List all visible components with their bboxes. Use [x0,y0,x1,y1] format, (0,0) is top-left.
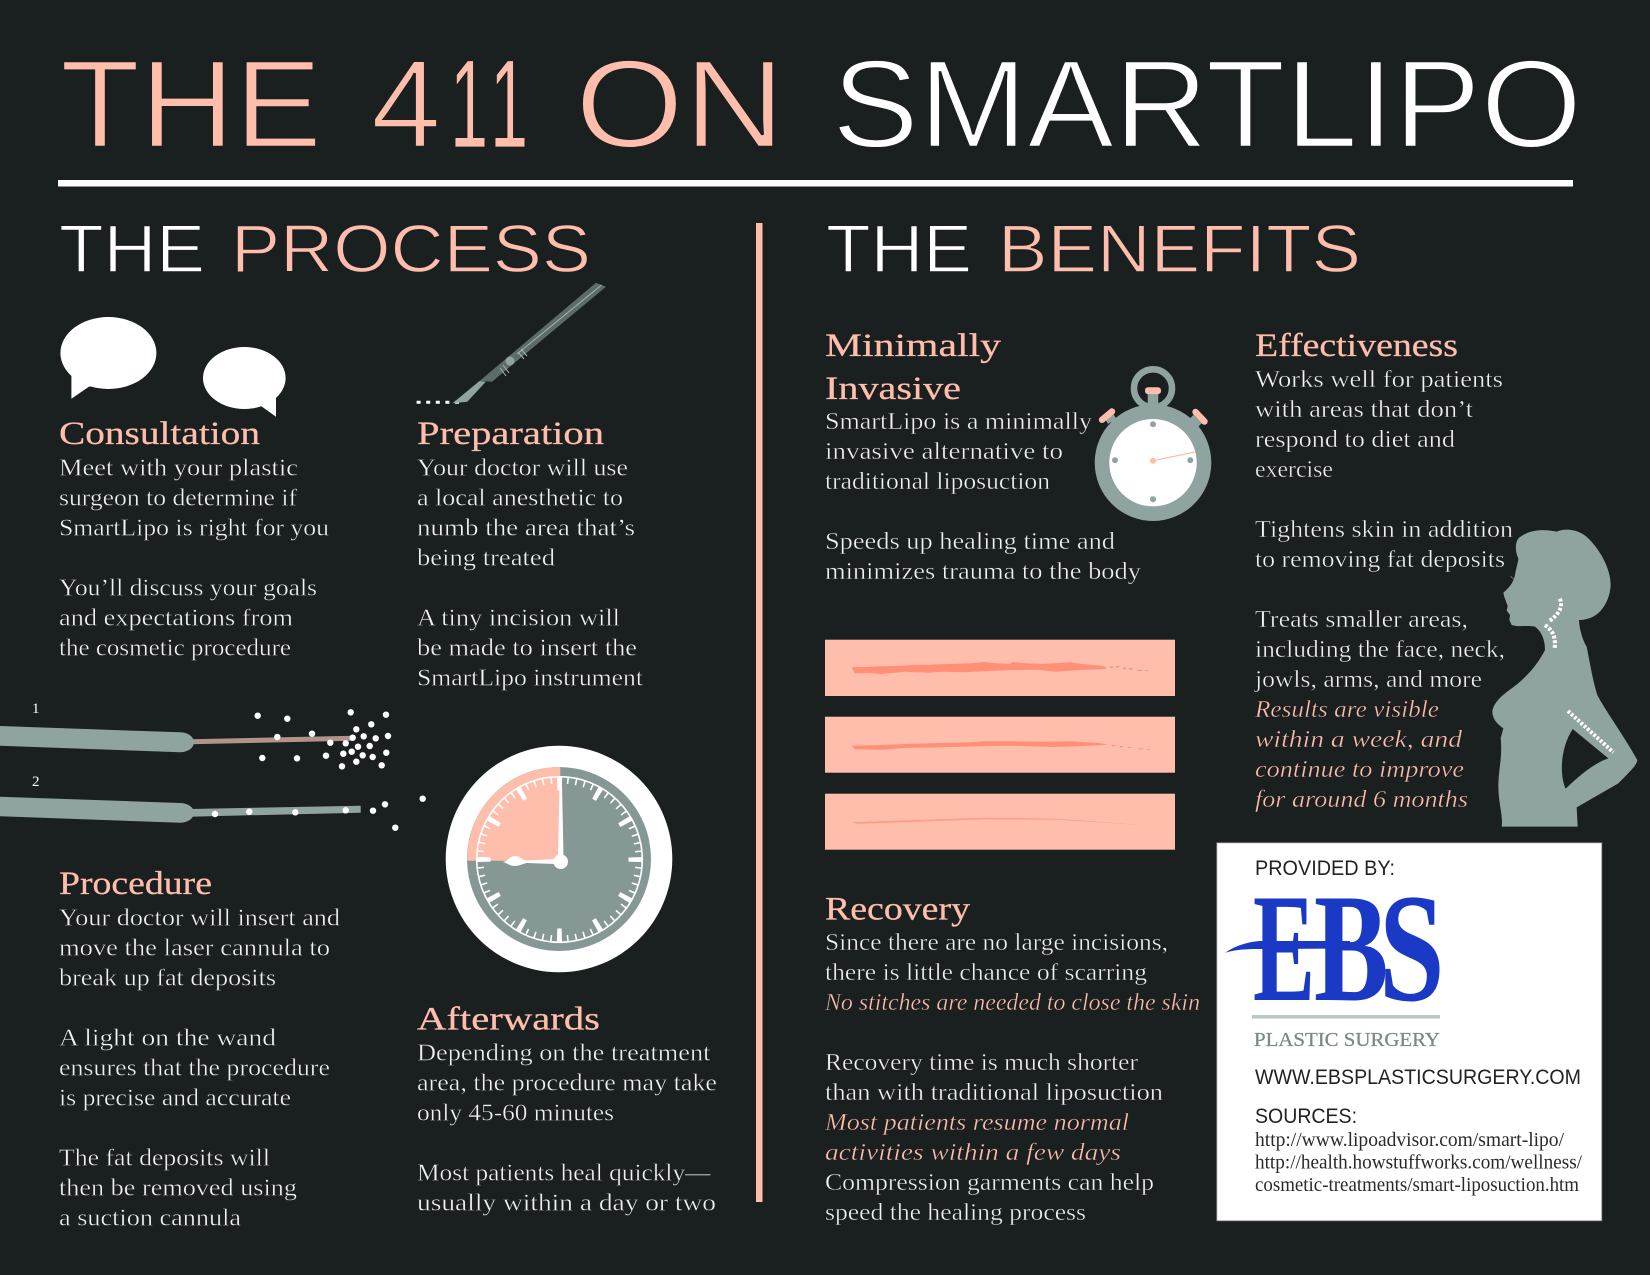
block: procedure [59,866,340,1232]
heading: the process: THE [59,211,205,287]
block: procedure: a suction cannula [59,1206,241,1232]
icon: clock with shaded quarter [446,746,672,972]
block: afterwards [417,1002,717,1216]
logo: EBS Plastic Surgery: S [1379,862,1445,1034]
title [60,35,1582,174]
block: effectiveness: Effectiveness [1255,328,1458,364]
block: recovery: Recovery time is much shorter [825,1050,1138,1076]
block: consultation [59,416,329,662]
sources list: http://health.howstuffworks.com/wellness/ [1255,1152,1583,1174]
illustration: female silhouette with treatment areas [1492,530,1637,827]
block: minimally invasive: Invasive [825,371,961,407]
block: effectiveness [1254,328,1513,813]
title: 1 [490,35,528,174]
block: effectiveness: with areas that don’t [1255,397,1473,423]
block: afterwards: only 45-60 minutes [417,1100,614,1126]
block: minimally invasive: traditional liposuction [825,469,1050,495]
block: recovery: Most patients resume normal [824,1110,1129,1136]
title: 1 [450,35,488,174]
block: effectiveness: for around 6 months [1255,787,1468,813]
block: effectiveness: respond to diet and [1255,427,1455,453]
block: preparation: Your doctor will use [417,456,628,482]
block: effectiveness: Works well for patients [1255,367,1503,393]
block: minimally invasive: minimizes trauma to the body [825,559,1141,585]
title: 4 [371,35,441,174]
illustration: laser cannula step 1: 1 [32,701,40,717]
block: procedure: Your doctor will insert and [59,906,340,932]
block: preparation: be made to insert the [417,636,637,662]
block: preparation: numb the area that’s [417,516,635,542]
logo: EBS Plastic Surgery: B [1314,863,1388,1034]
block: afterwards: Depending on the treatment [417,1040,711,1066]
block: effectiveness: including the face, neck, [1255,637,1505,663]
block: effectiveness: jowls, arms, and more [1254,667,1482,693]
block: consultation: and expectations from [59,606,293,632]
illustration: suction cannula step 2: 2 [32,774,40,790]
block: effectiveness: exercise [1255,457,1333,483]
icon: scalpel [417,283,606,403]
website: WWW.EBSPLASTICSURGERY.COM [1255,1066,1581,1089]
block: minimally invasive: Minimally [825,328,1002,364]
block: consultation: surgeon to determine if [59,486,297,512]
title: ON [575,35,785,174]
block: consultation: Meet with your plastic [59,456,298,482]
icon: speech bubbles [60,317,286,417]
block: procedure: then be removed using [59,1176,297,1202]
block: recovery: than with traditional liposuction [825,1080,1163,1106]
heading: the process: PROCESS [231,211,591,287]
heading: the process [59,211,591,287]
block: consultation: You’ll discuss your goals [59,576,317,602]
block: effectiveness: Results are visible [1254,697,1439,723]
panel: provider and sources [1217,843,1602,1221]
block: afterwards: usually within a day or two [417,1190,716,1216]
block: preparation: a local anesthetic to [417,486,623,512]
heading: the benefits [826,211,1361,287]
block: recovery: No stitches are needed to close the skin [824,990,1200,1016]
block: preparation: Preparation [417,416,604,452]
block: recovery: speed the healing process [825,1200,1086,1226]
block: preparation [417,416,643,692]
block: procedure: break up fat deposits [59,966,276,992]
block: effectiveness: Treats smaller areas, [1255,607,1468,633]
block: minimally invasive [825,328,1141,585]
block: procedure: A light on the wand [59,1026,276,1052]
block: effectiveness: continue to improve [1255,757,1464,783]
logo: EBS Plastic Surgery: PLASTIC SURGERY [1254,1029,1440,1051]
block: afterwards: Most patients heal quickly— [417,1160,712,1186]
block: recovery: Recovery [825,892,971,928]
block: preparation: being treated [417,546,555,572]
block: preparation: A tiny incision will [417,606,620,632]
divider line [756,223,762,1202]
block: afterwards: Afterwards [417,1002,600,1038]
block: recovery [824,892,1200,1226]
illustration: laser cannula step 1 [0,701,391,770]
block: consultation: SmartLipo is right for you [59,516,329,542]
sources list [1255,1105,1583,1196]
block: procedure: The fat deposits will [59,1146,270,1172]
title: THE [60,35,322,174]
block: procedure: ensures that the procedure [59,1056,330,1082]
block: effectiveness: within a week, and [1255,727,1463,753]
block: recovery: Since there are no large incisions, [825,930,1168,956]
illustration: suction cannula step 2 [0,774,426,831]
before and after strips with scars [825,640,1175,850]
sources list: SOURCES: [1255,1105,1357,1128]
logo: EBS Plastic Surgery: E [1253,862,1315,1034]
block: consultation: the cosmetic procedure [59,636,291,662]
block: recovery: Compression garments can help [825,1170,1154,1196]
block: preparation: SmartLipo instrument [417,666,643,692]
sources list: http://www.lipoadvisor.com/smart-lipo/ [1255,1130,1565,1151]
block: effectiveness: to removing fat deposits [1255,547,1505,573]
block: procedure: move the laser cannula to [59,936,330,962]
block: minimally invasive: SmartLipo is a minimally [825,409,1092,435]
block: minimally invasive: Speeds up healing time and [825,529,1115,555]
provided by label: PROVIDED BY: [1255,857,1395,880]
logo: EBS Plastic Surgery [1225,862,1445,1051]
title: SMARTLIPO [832,35,1582,174]
block: procedure: Procedure [59,866,212,902]
block: afterwards: area, the procedure may take [417,1070,717,1096]
block: recovery: there is little chance of scarring [825,960,1147,986]
block: recovery: activities within a few days [825,1140,1121,1166]
heading: the benefits: THE [826,211,972,287]
block: effectiveness: Tightens skin in addition [1255,517,1513,543]
block: minimally invasive: invasive alternative to [825,439,1063,465]
sources list: cosmetic-treatments/smart-liposuction.htm [1255,1175,1579,1196]
block: consultation: Consultation [59,416,260,452]
heading: the benefits: BENEFITS [998,211,1361,287]
icon: stopwatch [1095,369,1211,521]
block: procedure: is precise and accurate [59,1086,291,1112]
